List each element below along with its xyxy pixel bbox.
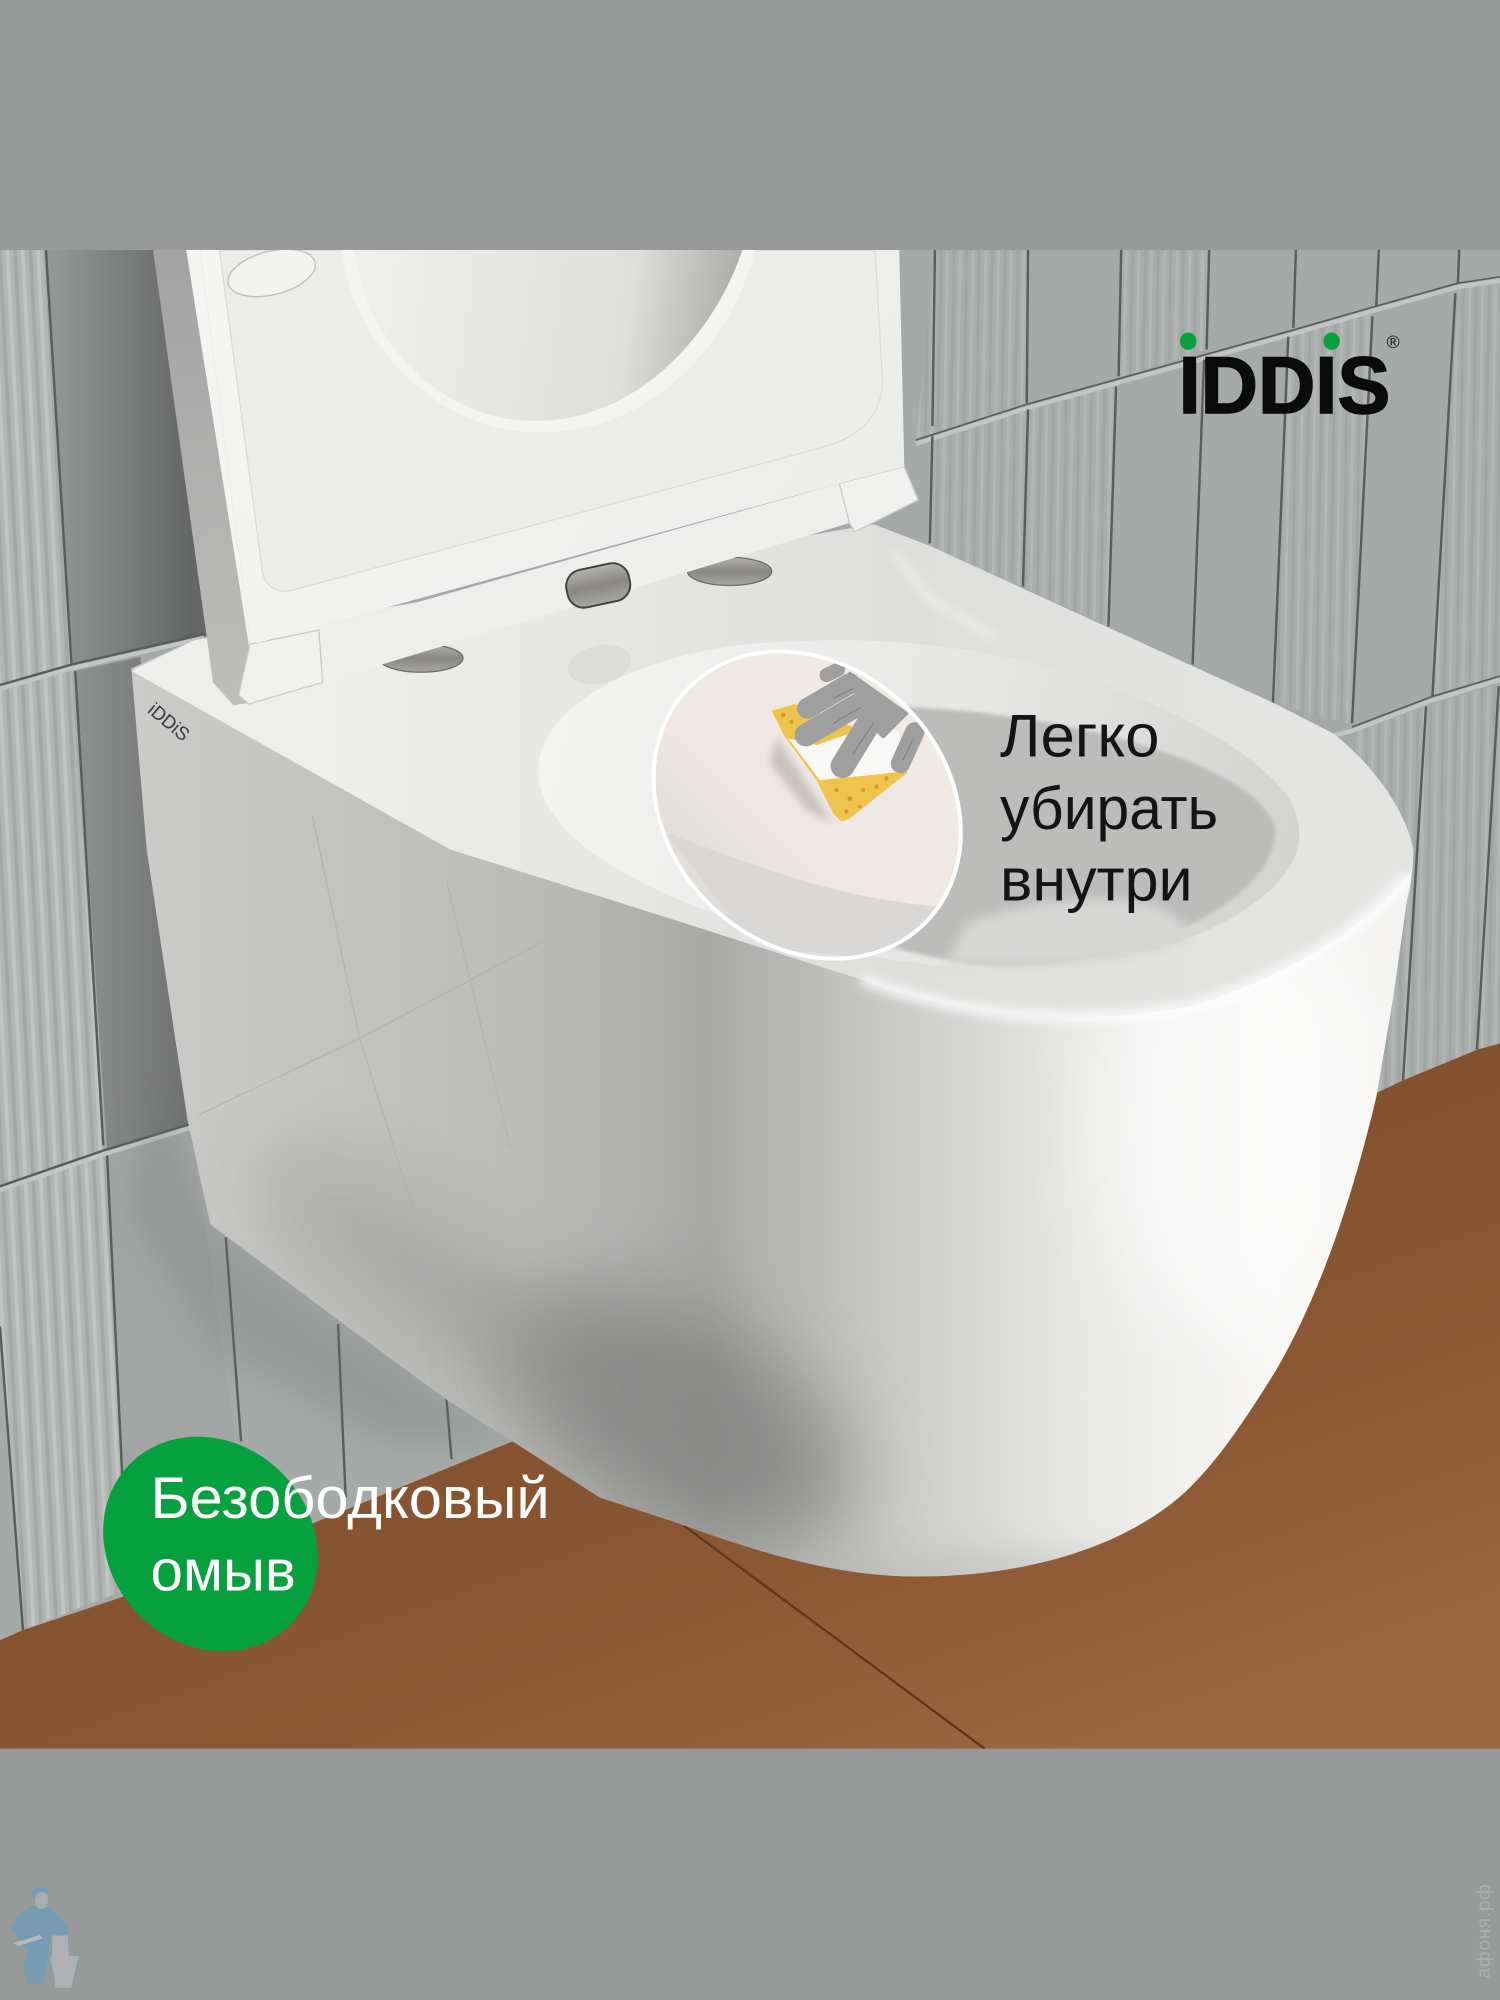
iddis logo: ® [1386, 332, 1400, 352]
product photo panel [0, 241, 1500, 1749]
tile grout highlights [0, 281, 1500, 1190]
lid white side strip [186, 250, 250, 644]
gloved hand [806, 669, 915, 766]
inset shaded band [667, 833, 940, 963]
sponge holes [781, 713, 889, 814]
sponge shadow [770, 737, 833, 823]
inset white outline [591, 589, 1024, 1021]
tile reflections on body [199, 816, 543, 1276]
rim highlight [861, 876, 1407, 1017]
body shading [228, 906, 1378, 1626]
green badge [59, 1392, 550, 1696]
bowl opening [538, 640, 1299, 969]
magnified inset: sponge cleaning [591, 589, 1024, 1021]
soap foam [788, 727, 910, 780]
callout: easy to clean inside [1000, 702, 1218, 914]
lid left hinge tab [239, 630, 323, 704]
reflection of hinge button on deck [564, 639, 635, 690]
callout: easy to clean inside: внутри [1000, 847, 1193, 914]
shadow of toilet on wall [135, 1130, 478, 1439]
seat opening [355, 250, 742, 421]
small brand mark on toilet: iDDiS [143, 699, 193, 746]
tile joints [0, 250, 1500, 1630]
sponge [772, 704, 913, 822]
seat bumper [223, 241, 320, 305]
metal seat mounts [379, 557, 772, 672]
lid outer edge [153, 250, 250, 705]
bowl interior [714, 706, 1276, 966]
watermark: plumber figure [10, 1887, 79, 1988]
water surface [944, 899, 1193, 965]
iddis logo: IDDIS [1179, 341, 1390, 431]
lid hinge bar [323, 483, 849, 682]
toilet seat lid [153, 241, 918, 705]
gloss reflections on deck [893, 551, 995, 638]
toilet body [131, 524, 1413, 1626]
badge text: Безободковый [151, 1466, 550, 1531]
hinge button [563, 560, 633, 611]
glove folds [833, 688, 913, 760]
lid inner recess [219, 250, 883, 591]
top deck and rim [131, 524, 1413, 1017]
callout: easy to clean inside: Легко [1000, 702, 1159, 769]
lid face [200, 250, 904, 643]
tiled wall [0, 250, 1500, 1653]
callout: easy to clean inside: убирать [1000, 775, 1218, 842]
seat opening rim [342, 250, 755, 432]
watermark: site name: афоня.рф [1474, 1884, 1495, 1978]
badge text [151, 1466, 550, 1604]
badge text: омыв [151, 1539, 296, 1604]
terracotta floor [0, 1043, 1500, 1749]
lid right hinge tab [839, 467, 918, 532]
